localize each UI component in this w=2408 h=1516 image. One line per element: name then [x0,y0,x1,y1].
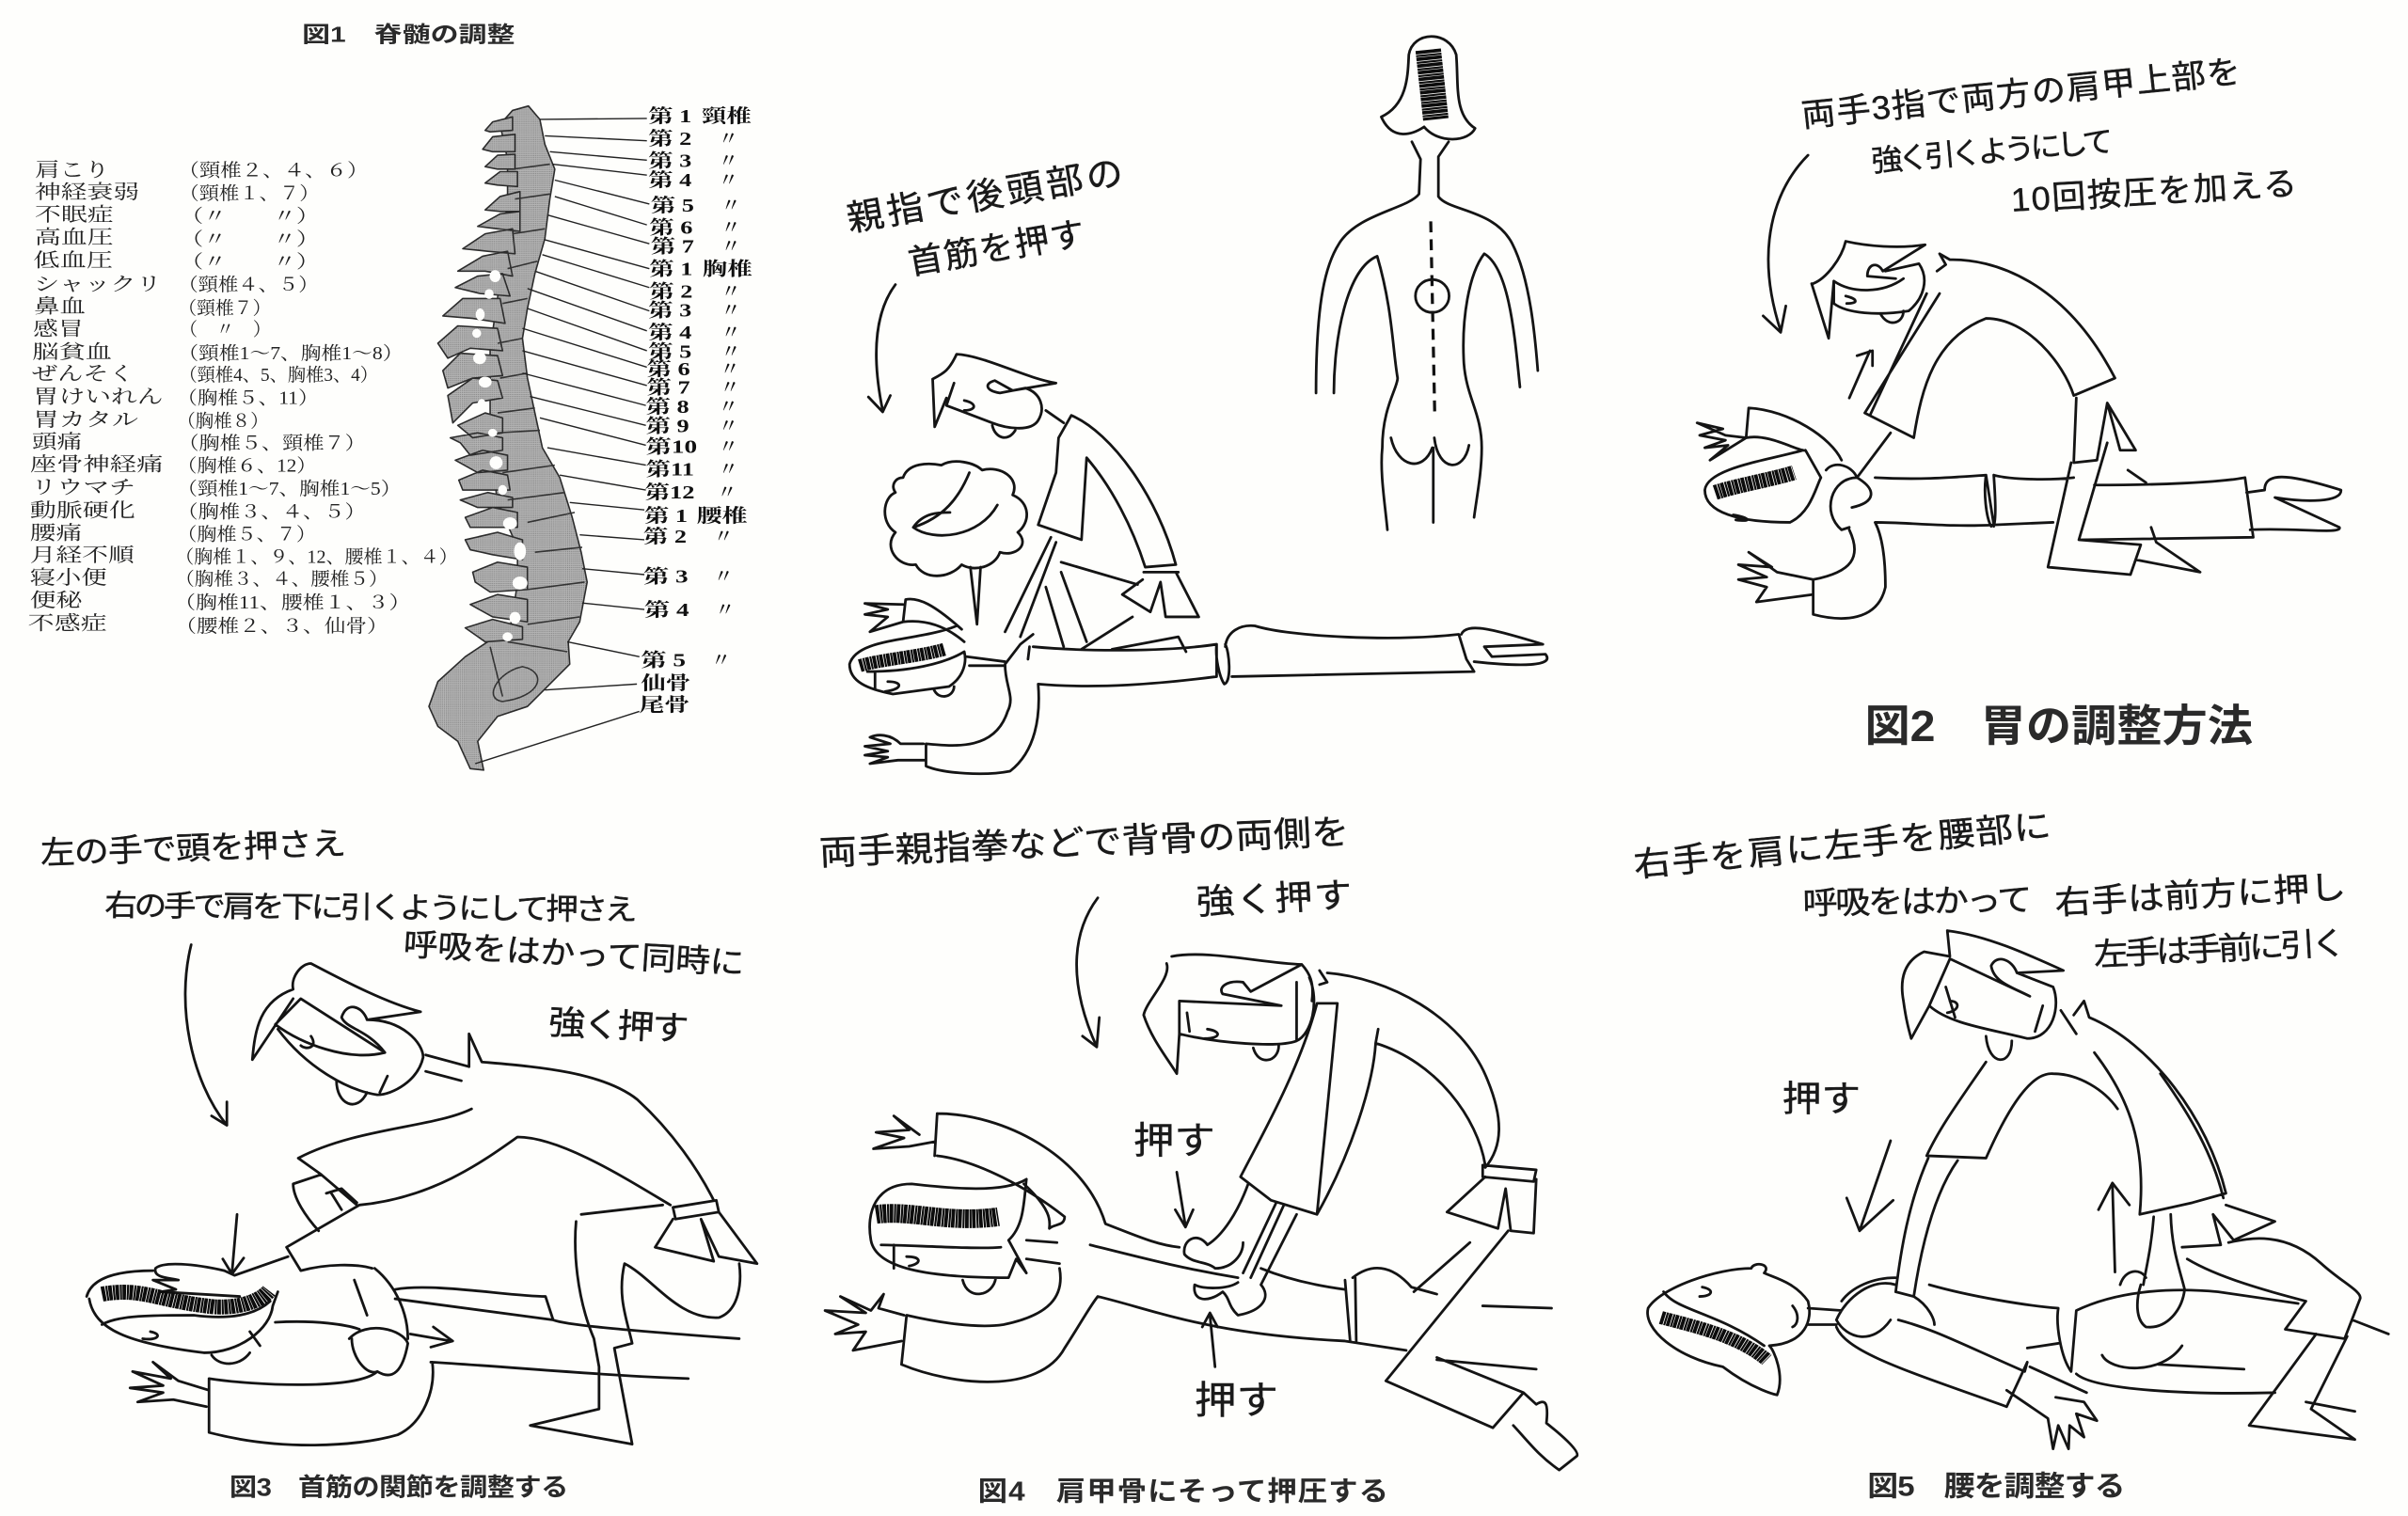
figure 3 caption: 図3 首筋の関節を調整する [230,1474,568,1501]
vertebra labels: 尾骨 [639,694,689,716]
heading: figure 1: 図1 脊髄の調整 [302,22,515,46]
vertebra labels: 〃 [721,377,739,398]
vertebra labels: 第 3 [648,299,691,321]
symptom list: 動脈硬化 [30,500,135,522]
arrows [185,945,452,1347]
vertebra labels: 腰椎 [697,505,748,527]
vertebra labels: 第10 [646,435,697,457]
lying patient [825,1113,1551,1382]
handwritten caption: 右の手で肩を下に引くようにして押さえ [104,890,638,927]
symptom list: （頸椎1～7、胸椎1～8） [178,343,403,364]
vertebra labels: 〃 [721,323,740,343]
vertebra labels: 第 8 [646,396,689,418]
lying patient [87,1271,739,1445]
symptom list: 鼻血 [34,296,86,318]
symptom list: 座骨神経痛 [30,453,164,475]
handwritten caption: 右手は前方に押し [2053,869,2347,922]
vertebra labels: 〃 [721,341,740,362]
leader lines [475,118,649,764]
symptom list: 寝小便 [30,567,107,589]
vertebra labels: 第 5 [651,195,694,216]
standing back view [1316,37,1538,529]
handwritten caption [844,153,1126,282]
symptom list: （頸椎２、４、６） [178,160,368,181]
symptom list: （頸椎1～7、胸椎1～5） [177,479,401,499]
panel: neck pressing figure [844,37,1547,774]
symptom list: （胸椎６、12） [177,455,316,476]
vertebra labels: 第11 [646,459,694,481]
handwritten caption: 強く引くようにして [1870,124,2115,178]
handwritten caption: 呼吸をはかって同時に [403,926,746,982]
panel: figure 4 shoulder blade [818,813,1577,1507]
symptom list: （〃 〃） [180,206,320,227]
practitioner [153,963,757,1445]
vertebra labels: 〃 [719,170,737,191]
vertebra labels: 第 6 [647,358,690,380]
practitioner [933,355,1198,652]
vertebra labels: 〃 [719,397,737,418]
vertebra labels: 第 4 [648,169,691,191]
vertebra labels: 仙骨 [641,672,690,694]
vertebra labels: 第 5 [648,340,691,362]
lying patient [1648,1264,2298,1449]
handwritten caption: 左手は手前に引く [2093,925,2347,973]
symptom list: （胸椎５、11） [177,388,319,409]
vertebra labels: 〃 [716,600,735,621]
arrows and press label: 押す [1782,1080,1861,1119]
vertebra labels: 第 3 [648,150,691,172]
symptom list: （腰椎２、３、仙骨） [175,616,388,637]
symptom list: 高血圧 [35,227,114,248]
vertebra labels: 〃 [719,460,737,481]
symptom list: （胸椎５、７） [177,524,316,545]
vertebra labels: 〃 [721,237,740,258]
symptom list: ぜんそく [32,364,135,385]
practitioner [1144,955,1577,1470]
symptom list: （胸椎１、９、12、腰椎１、４） [175,546,458,567]
vertebra labels: 〃 [719,436,737,457]
vertebra labels: 〃 [721,359,739,380]
symptom list: 脳貧血 [32,341,112,363]
symptom list: （〃 〃） [180,229,320,249]
vertebra labels: 〃 [711,650,731,671]
handwritten caption [818,813,1353,923]
symptom list: シャックリ [34,275,162,295]
vertebra labels: 第 1 [649,259,692,280]
symptom list: （頸椎4、5、胸椎3、4） [179,365,378,386]
vertebra labels: 〃 [714,566,733,587]
vertebra labels: 第 1 [648,105,691,127]
vertebra labels: 第 2 [648,128,691,150]
handwritten caption [40,826,746,1048]
symptom list: （胸椎８） [177,411,269,432]
handwritten caption [1632,807,2347,973]
symptom list: 不感症 [28,612,107,635]
handwritten caption: 左の手で頭を押さえ [40,826,347,871]
vertebra labels: 胸椎 [703,259,752,280]
symptom list: 肩こり [35,159,109,181]
figure 4 caption: 図4 肩甲骨にそって押圧する [978,1477,1388,1507]
arrows [1763,155,1873,398]
lying patient [849,599,1547,774]
symptom list: （胸椎11、腰椎１、３） [174,592,410,613]
handwritten caption: 右手を肩に左手を腰部に [1632,807,2052,884]
handwritten caption: 両手親指拳などで背骨の両側を [818,813,1350,873]
practitioner [1895,931,2388,1440]
symptom list: 神経衰弱 [35,181,139,203]
handwritten caption: 呼吸をはかって [1802,882,2033,922]
symptom list: 腰痛 [30,522,82,544]
vertebra labels: 〃 [714,527,733,547]
symptom list: 不眠症 [35,204,114,226]
arrows and press label [1782,1080,2130,1272]
panel: figure 1 spine chart [28,22,752,770]
vertebra labels: 第 2 [649,280,692,302]
symptom list: 月経不順 [30,545,135,566]
symptom list: （頸椎７） [178,298,271,319]
symptom list: （ 〃 ） [179,320,271,340]
vertebra labels: 第 4 [648,322,691,343]
arrows and press labels: 押す [1133,1119,1215,1161]
vertebra labels: 〃 [721,196,740,216]
vertebra labels: 第 7 [647,376,690,398]
vertebra labels: 〃 [721,218,740,239]
symptom list: 感冒 [33,318,84,340]
arrow [868,285,895,412]
vertebra labels: 〃 [721,300,740,321]
symptom list: 低血圧 [33,250,113,272]
vertebra labels: 第 7 [651,236,694,258]
symptom list: （胸椎５、頸椎７） [178,434,366,454]
handwritten caption [1799,53,2298,219]
vertebra labels: 〃 [718,482,737,503]
handwritten caption: 首筋を押す [905,214,1087,282]
symptom list: （胸椎３、４、５） [177,502,366,523]
vertebra labels: 頸椎 [702,105,752,127]
symptom list [28,159,458,637]
vertebra labels [639,105,752,716]
vertebra labels: 第12 [645,482,694,503]
vertebra labels: 第 9 [646,416,689,437]
vertebra labels: 〃 [719,417,737,437]
panel: figure 5 waist [1632,807,2388,1502]
handwritten caption: 両手3指で両方の肩甲上部を [1799,53,2242,134]
arrows and press labels [1077,898,1278,1423]
symptom list: 便秘 [30,590,84,611]
panel: figure 3 neck joint [40,826,757,1501]
vertebra labels: 第 3 [643,565,689,587]
handwritten caption: 親指で後頭部の [844,153,1126,240]
vertebra labels: 第 4 [644,599,689,621]
symptom list: （〃 〃） [180,252,320,273]
vertebra labels: 第 5 [641,649,686,671]
symptom list: （胸椎３、４、腰椎５） [175,569,388,590]
figure 2 title: 図2 胃の調整方法 [1864,703,2253,751]
handwritten caption: 強く押す [1196,876,1353,923]
symptom list: 胃けいれん [33,387,164,407]
symptom list: 頭痛 [32,432,82,453]
vertebra labels: 〃 [719,151,737,172]
hair cloud [885,462,1027,624]
vertebra labels: 〃 [719,129,737,150]
vertebra labels: 〃 [721,281,740,302]
vertebra labels: 第 2 [643,526,687,547]
vertebra labels: 第 1 [644,505,688,527]
figure 5 caption: 図5 腰を調整する [1867,1471,2125,1502]
practitioner [1812,242,2135,529]
symptom list: 胃カタル [33,410,139,431]
symptom list: リウマチ [31,478,135,498]
symptom list: （頸椎４、５） [178,275,319,295]
symptom list: （頸椎１、７） [179,183,320,204]
handwritten caption: 強く押す [547,1003,689,1048]
handwritten caption: 10回按圧を加える [2010,166,2298,219]
vertebra labels: 第 6 [649,217,692,239]
lying patient [1697,408,2341,619]
panel: figure 2 stomach adjustment [1697,53,2341,751]
spine illustration [429,106,587,770]
arrows and press labels: 押す [1195,1380,1278,1423]
